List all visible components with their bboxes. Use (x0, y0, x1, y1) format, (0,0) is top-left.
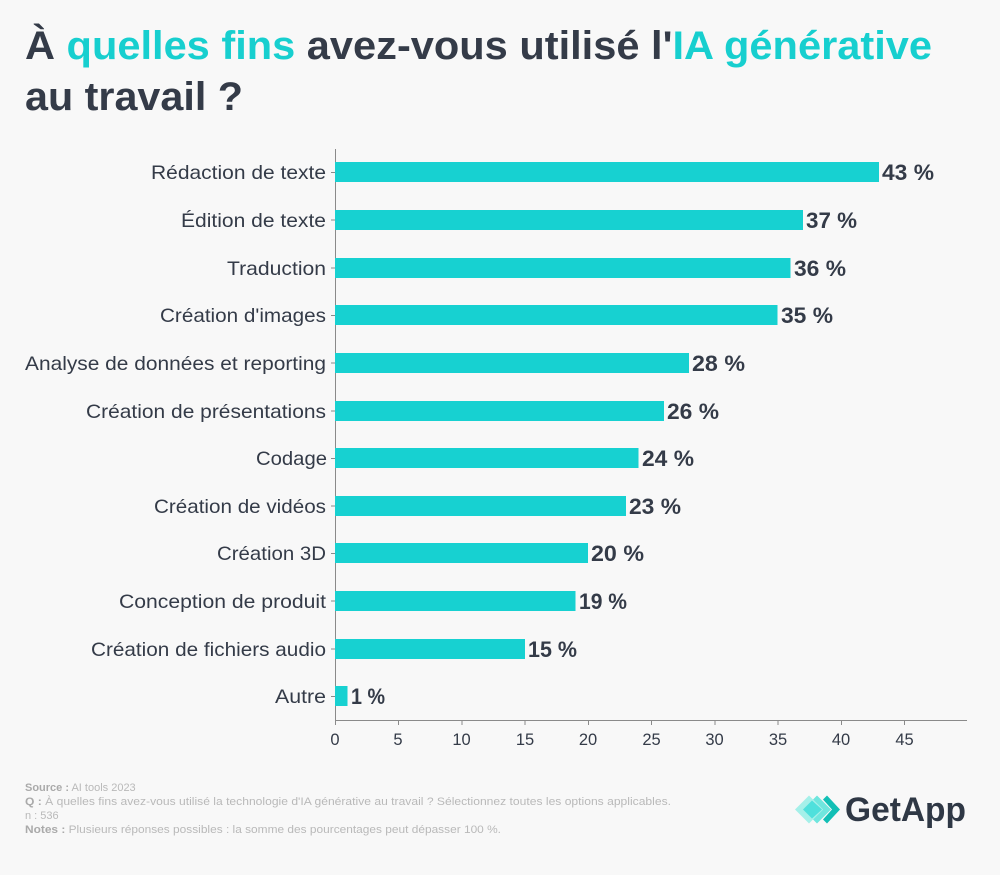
row: Traduction: 36 % (794, 256, 846, 281)
row: Analyse de données et reporting (25, 351, 745, 376)
axis tick labels: 10 (452, 731, 471, 749)
axis tick labels (330, 731, 914, 749)
axis tick labels: 45 (895, 731, 914, 749)
row: Traduction: Traduction (227, 258, 326, 280)
row: Création de vidéos: Création de vidéos (154, 496, 326, 518)
source notes: Notes : Plusieurs réponses possibles : la somme des pourcentages peut dépasser 100 %. (25, 824, 501, 836)
row: Création de fichiers audio: Création de fichiers audio (91, 639, 326, 661)
row: Création d'images: 35 % (781, 303, 833, 328)
row: Création de présentations (86, 399, 719, 424)
title: au travail ? (25, 75, 243, 119)
row: Création de présentations: Création de présentations (86, 401, 326, 423)
axis tick labels: 20 (579, 731, 597, 749)
row: Création d'images: Création d'images (160, 305, 326, 327)
row: Édition de texte: 37 % (806, 208, 857, 233)
wordmark: GetApp (845, 791, 966, 829)
axis tick labels: 40 (832, 731, 850, 749)
title (25, 23, 932, 119)
bar chart (25, 149, 967, 749)
axis tick labels: 25 (642, 731, 661, 749)
row: Création de présentations: 26 % (667, 399, 719, 424)
axis tick labels: 30 (705, 731, 724, 749)
source notes: Q : À quelles fins avez-vous utilisé la technologie d'IA générative au travail ? Sélectionnez toutes les options applicables. (25, 795, 671, 808)
row: Autre: 1 % (351, 684, 385, 709)
row: Édition de texte: Édition de texte (181, 209, 326, 232)
row: Rédaction de texte (151, 160, 934, 185)
row: Création 3D: 20 % (591, 541, 644, 566)
logo: GetApp (795, 791, 966, 829)
row: Traduction (227, 256, 846, 281)
axis tick labels: 5 (393, 731, 403, 749)
row: Création de fichiers audio (91, 637, 577, 662)
row: Codage: Codage (256, 448, 327, 470)
row: Rédaction de texte: 43 % (882, 160, 934, 185)
row: Conception de produit: Conception de produit (119, 591, 327, 613)
axis tick labels: 15 (516, 731, 534, 749)
row: Codage: 24 % (642, 446, 694, 471)
axes (331, 149, 967, 725)
title: À quelles fins avez-vous utilisé l' IA générative (25, 23, 932, 68)
row: Édition de texte (181, 208, 857, 233)
row: Conception de produit (119, 589, 627, 614)
row: Création de fichiers audio: 15 % (528, 637, 577, 662)
source notes: n : 536 (25, 810, 59, 822)
source notes (25, 782, 671, 836)
axis tick labels: 0 (330, 731, 340, 749)
source notes: Source : AI tools 2023 (25, 782, 136, 794)
row: Conception de produit: 19 % (579, 589, 627, 614)
icon: diamonds and chevrons (795, 796, 840, 824)
row: Création de vidéos (154, 494, 681, 519)
axis tick labels: 35 (769, 731, 787, 749)
row: Analyse de données et reporting: 28 % (692, 351, 745, 376)
row: Codage (256, 446, 694, 471)
row: Création 3D (217, 541, 644, 566)
row: Rédaction de texte: Rédaction de texte (151, 162, 326, 184)
row: Autre (275, 684, 385, 709)
row: Analyse de données et reporting: Analyse de données et reporting (25, 353, 326, 375)
row: Création d'images (160, 303, 833, 328)
row: Autre: Autre (275, 686, 326, 708)
row: Création 3D: Création 3D (217, 543, 326, 565)
row: Création de vidéos: 23 % (629, 494, 681, 519)
